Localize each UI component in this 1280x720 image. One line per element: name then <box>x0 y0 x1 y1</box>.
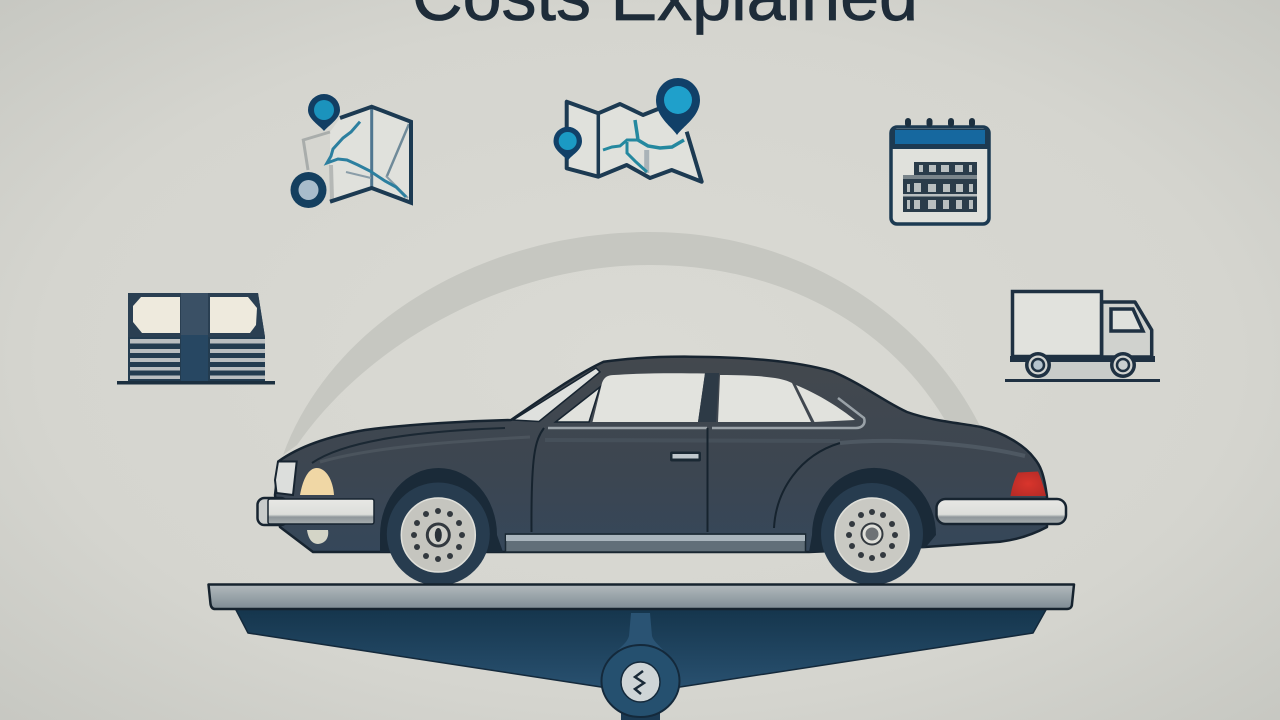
headlight <box>300 468 334 495</box>
icon: stack of banknotes <box>117 293 275 384</box>
rear side window <box>718 375 811 422</box>
scale beam <box>208 584 1074 609</box>
quarter panel line <box>774 443 840 528</box>
front side window <box>592 373 705 422</box>
icon: folded map with route, centre <box>554 78 702 182</box>
front bumper <box>258 498 374 525</box>
door handle <box>670 452 701 462</box>
rear bumper <box>936 499 1066 524</box>
calendar rings <box>905 118 975 127</box>
icon: delivery truck <box>1005 292 1160 382</box>
balance scale <box>208 584 1074 720</box>
tail light <box>1010 472 1046 496</box>
pin: large <box>656 78 700 135</box>
quarter vent window <box>556 387 600 422</box>
icon: calendar <box>891 118 989 224</box>
pin: small <box>554 127 582 161</box>
door highlight <box>545 440 840 441</box>
truck wheels <box>1025 352 1136 378</box>
icon: folded map with route, left <box>290 94 411 208</box>
scale underside <box>235 608 1047 687</box>
rear wheel <box>809 468 936 585</box>
front wheel <box>380 468 503 586</box>
arc behind car <box>283 232 981 455</box>
pin: map start <box>308 94 340 131</box>
grille <box>275 462 297 495</box>
rear quarter window <box>796 385 855 422</box>
banknote stripes <box>130 339 265 379</box>
hood highlight <box>320 437 530 462</box>
pillar <box>698 373 719 422</box>
car <box>258 357 1066 586</box>
scale pivot <box>602 613 680 720</box>
hood crease <box>312 428 505 463</box>
windshield <box>513 368 600 422</box>
pin: map end <box>290 172 326 208</box>
sill chrome <box>506 534 806 552</box>
belt trim <box>548 398 865 428</box>
fog lamp <box>307 530 328 544</box>
banknote band <box>181 293 208 382</box>
door seams <box>531 428 708 532</box>
calendar grid <box>903 162 977 212</box>
car body <box>275 357 1047 552</box>
quarter panel highlight <box>840 441 1025 456</box>
